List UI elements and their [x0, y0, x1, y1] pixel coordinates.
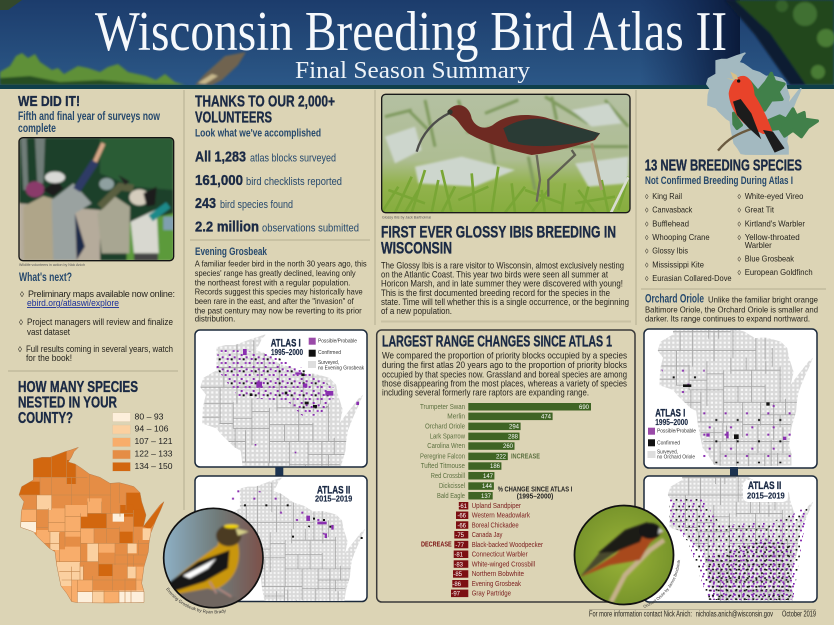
stat: atlas blocks: All 1,283	[195, 150, 246, 166]
species list: White-eyed Vireo	[745, 191, 804, 201]
stat: observations: 2.2 million	[195, 220, 259, 236]
subtitle: Final Season Summary	[295, 58, 530, 84]
legend: species count: 107 – 121	[134, 437, 173, 446]
bar chart: percent change: 186	[490, 464, 501, 470]
photo caption: Glossy Ibis by Jack Bartholmai	[382, 215, 431, 220]
stat: checklists	[195, 173, 342, 189]
stat: atlas blocks: atlas blocks surveyed	[250, 153, 336, 165]
text block: method	[382, 351, 627, 399]
bar chart: percent change: -66	[457, 523, 467, 529]
bar chart: percent change: DECREASE	[421, 541, 452, 548]
footer contact line: For more information contact Nick Anich:	[589, 610, 692, 619]
title: Wisconsin Breeding Bird Atlas II	[95, 1, 727, 63]
text block: evening grosbeak: species' range has greatly declined, leaving only	[195, 268, 356, 278]
species list: ◊	[645, 208, 649, 215]
text block: evening grosbeak: Records suggest this species may historically have	[195, 287, 363, 297]
map: orchard oriole 2015-2019	[668, 477, 813, 601]
what's next list: ◊	[19, 318, 23, 327]
text block: evening grosbeak	[195, 246, 367, 324]
heading: we did it: complete	[18, 123, 56, 135]
bar chart: percent change: Gray Partridge	[472, 591, 511, 598]
heading: first ever glossy ibis: WISCONSIN	[381, 238, 452, 257]
heading: atlas I: ATLAS I	[655, 408, 685, 420]
bar chart: percent change: Lark Sparrow	[430, 434, 466, 440]
what's next list: ebird.org/atlaswi/explore	[27, 298, 119, 308]
legend: species count: 122 – 133	[134, 450, 173, 458]
legend: species count: 134 – 150	[134, 462, 173, 471]
species list: ◊	[645, 262, 649, 269]
text block: method: occupied by that species now. Grassland and boreal species are among	[382, 369, 627, 380]
text block: glossy ibis: This is the first documented breeding record for the species in the	[381, 288, 610, 299]
stat: checklists: bird checklists reported	[246, 176, 342, 188]
bar chart: percent change: 222	[496, 454, 507, 460]
species list: ◊	[645, 194, 649, 201]
species list: Kirtland's Warbler	[745, 218, 805, 228]
heading: we did it: Fifth and final year of surveys now	[18, 111, 160, 123]
heading: how many species: NESTED IN YOUR	[18, 394, 117, 412]
stat: checklists: 161,000	[195, 173, 243, 189]
map legend	[308, 338, 364, 371]
bar chart: percent change: Western Meadowlark	[472, 512, 530, 520]
stat: atlas blocks	[195, 150, 336, 166]
panel: 13 new breeding species	[645, 158, 818, 324]
map legend: Confirmed	[657, 440, 680, 446]
species list: Whooping Crane	[652, 232, 710, 242]
bar chart: percent change: % CHANGE SINCE ATLAS I	[498, 486, 572, 493]
text block: glossy ibis: of a new population.	[381, 306, 452, 317]
bar chart: percent change: -75	[455, 533, 465, 539]
text block: glossy ibis: The Glossy Ibis is a rare visitor to Wisconsin, almost exclusively nesting	[381, 260, 624, 271]
panel: largest range changes	[377, 330, 635, 602]
bar chart: percent change: Upland Sandpiper	[472, 503, 522, 510]
bar chart: percent change: -83	[454, 562, 464, 568]
what's next list: Preliminary maps available now online:	[28, 289, 175, 299]
heading: we did it	[18, 93, 160, 135]
text block: evening grosbeak: been rare in the east, and after the "invasion" of	[195, 296, 354, 306]
what's next list	[18, 270, 175, 363]
bar chart: percent change: -85	[453, 572, 463, 578]
species list: ◊	[738, 221, 742, 228]
panel: orchard oriole atlas I map	[643, 328, 818, 469]
legend: species count: 80 – 93	[134, 412, 164, 422]
bar chart: percent change: Bald Eagle	[437, 493, 465, 500]
heading: atlas II with white backing	[743, 480, 788, 502]
bar chart: percent change: 690	[579, 405, 590, 411]
heading: we did it: WE DID IT!	[18, 93, 80, 110]
text block: orchard oriole: Unlike the familiar bright orange	[708, 295, 818, 305]
photo credit: orchard oriole: Orchard Oriole by James Brodzinski	[644, 560, 680, 608]
stat: observations: observations submitted	[262, 223, 359, 235]
legend: species count: 94 – 106	[134, 425, 169, 434]
text block: evening grosbeak: distribution.	[195, 314, 235, 324]
heading: how many species	[18, 379, 138, 427]
bar chart: percent change: Red Crossbill	[431, 473, 465, 480]
heading: atlas II: 2015–2019	[315, 495, 353, 504]
stat: species: 243	[195, 196, 216, 212]
footer contact line	[589, 610, 816, 619]
species list	[645, 191, 813, 283]
text block: method: during the first atlas 20 years ago to the proportion of priority blocks	[382, 360, 627, 371]
heading: how many species: COUNTY?	[18, 410, 73, 427]
photo: orchard oriole circle	[574, 505, 674, 605]
map legend: Possible/Probable	[657, 429, 696, 435]
bar chart: percent change: 144	[482, 484, 493, 490]
bar chart: percent change: Connecticut Warbler	[472, 552, 528, 558]
legend: species count	[112, 412, 173, 471]
bar chart: percent change: White-winged Crossbill	[472, 561, 535, 568]
heading: atlas I: 1995–2000	[271, 348, 303, 357]
footer contact line: nicholas.anich@wisconsin.gov	[696, 610, 773, 619]
bar chart: percent change: Dickcissel	[439, 483, 465, 490]
heading: thanks: THANKS TO OUR 2,000+	[195, 94, 335, 111]
map: orchard oriole 1995-2000	[658, 330, 813, 466]
heading: first ever glossy ibis	[381, 222, 616, 257]
heading: new breeding species	[645, 158, 802, 187]
footer contact line: October 2019	[782, 610, 816, 619]
map: evening grosbeak 2015-2019	[232, 478, 365, 601]
species list: Great Tit	[745, 205, 775, 215]
photo caption: Wildlife volunteers in action by Nick Anich	[19, 263, 85, 267]
panel: evening grosbeak atlas II map	[194, 475, 368, 602]
connector between grosbeak maps	[275, 467, 283, 476]
bar chart: percent change: Northern Bobwhite	[472, 571, 524, 578]
species list: ◊	[645, 276, 649, 283]
stat: species	[195, 196, 293, 212]
text block: orchard oriole: darker. Its range continues to expand northward.	[645, 314, 810, 324]
heading: atlas I: 1995–2000	[655, 418, 688, 427]
bar chart: percent change: Evening Grosbeak	[472, 581, 521, 588]
species list: ◊	[645, 249, 649, 256]
heading: thanks: VOLUNTEERS	[195, 110, 272, 127]
map legend: Confirmed	[318, 350, 341, 356]
bar chart: percent change: Trumpeter Swan	[420, 404, 465, 411]
bar chart: percent change: Black-backed Woodpecker	[472, 542, 544, 549]
species list: European Goldfinch	[745, 267, 813, 277]
species list: Warbler	[745, 240, 772, 250]
photo: volunteers with binoculars	[19, 138, 174, 261]
heading: atlas II	[315, 484, 353, 504]
panel: glossy ibis story	[381, 94, 630, 317]
species list: Eurasian Collared-Dove	[652, 273, 732, 283]
photo: glossy ibis	[382, 94, 630, 213]
species list: King Rail	[652, 191, 682, 201]
map legend: Surveyed,	[318, 360, 339, 366]
species list: ◊	[645, 235, 649, 242]
heading: atlas I	[655, 408, 688, 427]
text block: glossy ibis: Horicon Marsh, and in late summer they were discovered with young!	[381, 279, 623, 290]
bar chart: percent change: 137	[481, 494, 492, 500]
bar chart: percent change: Orchard Oriole	[425, 424, 465, 430]
bar chart: percent change: 147	[483, 474, 494, 480]
map legend: no Orchard Oriole	[657, 454, 695, 460]
text block: glossy ibis: state. Time will tell whether this is a single occurrence, or the beginning	[381, 297, 629, 308]
bar chart: percent change: 294	[509, 424, 520, 430]
heading: first ever glossy ibis: FIRST EVER GLOSSY IBIS BREEDING IN	[381, 222, 616, 241]
species list: Canvasback	[652, 205, 693, 215]
bar chart: percent change: INCREASE	[511, 453, 540, 460]
heading: largest range changes: LARGEST RANGE CHANGES SINCE ATLAS 1	[382, 333, 612, 350]
bar chart: percent change: -77	[455, 543, 465, 549]
text block: method: those disappearing from the most places, whereas a variety of species	[382, 378, 627, 389]
species list: ◊	[738, 208, 742, 215]
species list: ◊	[645, 221, 649, 228]
map legend: Surveyed,	[657, 449, 678, 455]
heading: atlas II with white backing: 2015–2019	[747, 491, 785, 500]
bar chart: percent change: Merlin	[447, 414, 465, 420]
bar chart: percent change: Canada Jay	[472, 532, 503, 539]
bar chart: percent change: -81	[454, 552, 464, 558]
bar chart: percent change: 474	[541, 414, 552, 420]
text block: evening grosbeak: A familiar feeder bird in the north 30 years ago, this	[195, 259, 367, 269]
what's next list: ◊	[18, 345, 22, 354]
bar chart: percent change: Boreal Chickadee	[472, 522, 519, 529]
species list: ◊	[738, 257, 742, 264]
panel: thanks to volunteers	[195, 94, 367, 324]
text block: evening grosbeak: the past century may now be reverting to its prior	[195, 305, 362, 315]
bar chart: percent change: -86	[452, 582, 462, 588]
bar chart: percent change: -66	[457, 514, 467, 520]
choropleth map of Wisconsin counties	[17, 447, 165, 603]
what's next list: for the book!	[26, 353, 72, 363]
what's next list: What's next?	[19, 270, 72, 284]
panel: evening grosbeak atlas I map	[194, 329, 368, 468]
heading: atlas I: ATLAS I	[271, 338, 301, 350]
species list: ◊	[738, 194, 742, 201]
map legend: Possible/Probable	[318, 338, 357, 344]
bar chart: percent change: (1995–2000)	[517, 493, 553, 500]
panel: we did it	[18, 93, 175, 363]
what's next list: vast dataset	[27, 327, 70, 337]
text block: method: We compared the proportion of priority blocks occupied by a species	[382, 351, 627, 362]
heading: atlas I	[271, 338, 303, 357]
text block: glossy ibis	[381, 260, 629, 317]
icon: wisconsin outline with scarlet tanager and oak leaves	[707, 53, 817, 154]
species list: Blue Grosbeak	[745, 254, 795, 264]
map: evening grosbeak 1995-2000	[200, 334, 363, 466]
photo credit: evening grosbeak: Evening Grosbeak by Ryan Brady	[166, 588, 226, 614]
header banner	[0, 0, 834, 89]
bar chart: percent change: Tufted Titmouse	[421, 463, 465, 470]
text block: orchard oriole: Baltimore Oriole, the Orchard Oriole is smaller and	[645, 304, 818, 314]
heading: thanks	[195, 94, 335, 140]
stat: observations	[195, 220, 359, 236]
photo: evening grosbeak circle	[161, 507, 265, 613]
text block: evening grosbeak: the northeast forest with a regular population.	[195, 277, 350, 287]
what's next list: Full results coming in several years, watch	[26, 344, 173, 354]
what's next list: ◊	[20, 290, 24, 299]
species list: Mississippi Kite	[652, 259, 704, 269]
text block: orchard oriole	[645, 292, 818, 324]
heading: how many species: HOW MANY SPECIES	[18, 379, 138, 396]
heading: thanks: Look what we've accomplished	[195, 128, 321, 140]
panel: orchard oriole atlas II map	[643, 475, 818, 603]
text block: method: including several formerly rare raptors are expanding range.	[382, 388, 589, 399]
bar chart: percent change: -97	[451, 592, 461, 598]
bar chart: percent change: Peregrine Falcon	[420, 454, 465, 460]
bar chart: percent change: -61	[458, 504, 468, 510]
bar chart: percent change: 260	[503, 444, 514, 450]
heading: atlas II: ATLAS II	[317, 484, 350, 496]
map legend	[648, 428, 696, 460]
stat: species: bird species found	[220, 199, 293, 211]
what's next list: Project managers will review and finalize	[27, 317, 173, 327]
species list: ◊	[738, 235, 742, 242]
bar chart: percent change	[420, 403, 591, 598]
species list: Yellow-throated	[745, 232, 800, 242]
text block: glossy ibis: on the Atlantic Coast. This year two birds were seen all summer at	[381, 269, 608, 280]
bar chart: percent change: 288	[508, 434, 519, 440]
connector between oriole maps	[730, 467, 738, 476]
text block: evening grosbeak: Evening Grosbeak	[195, 246, 268, 258]
species list: ◊	[738, 270, 742, 277]
bar chart: percent change: Carolina Wren	[427, 443, 465, 450]
species list: Bufflehead	[652, 218, 689, 228]
text block: orchard oriole: Orchard Oriole	[645, 292, 704, 306]
species list: Glossy Ibis	[652, 246, 688, 256]
map legend: no Evening Grosbeak	[318, 365, 364, 371]
heading: atlas II with white backing: ATLAS II	[748, 480, 781, 492]
panel: county species map	[17, 379, 173, 603]
